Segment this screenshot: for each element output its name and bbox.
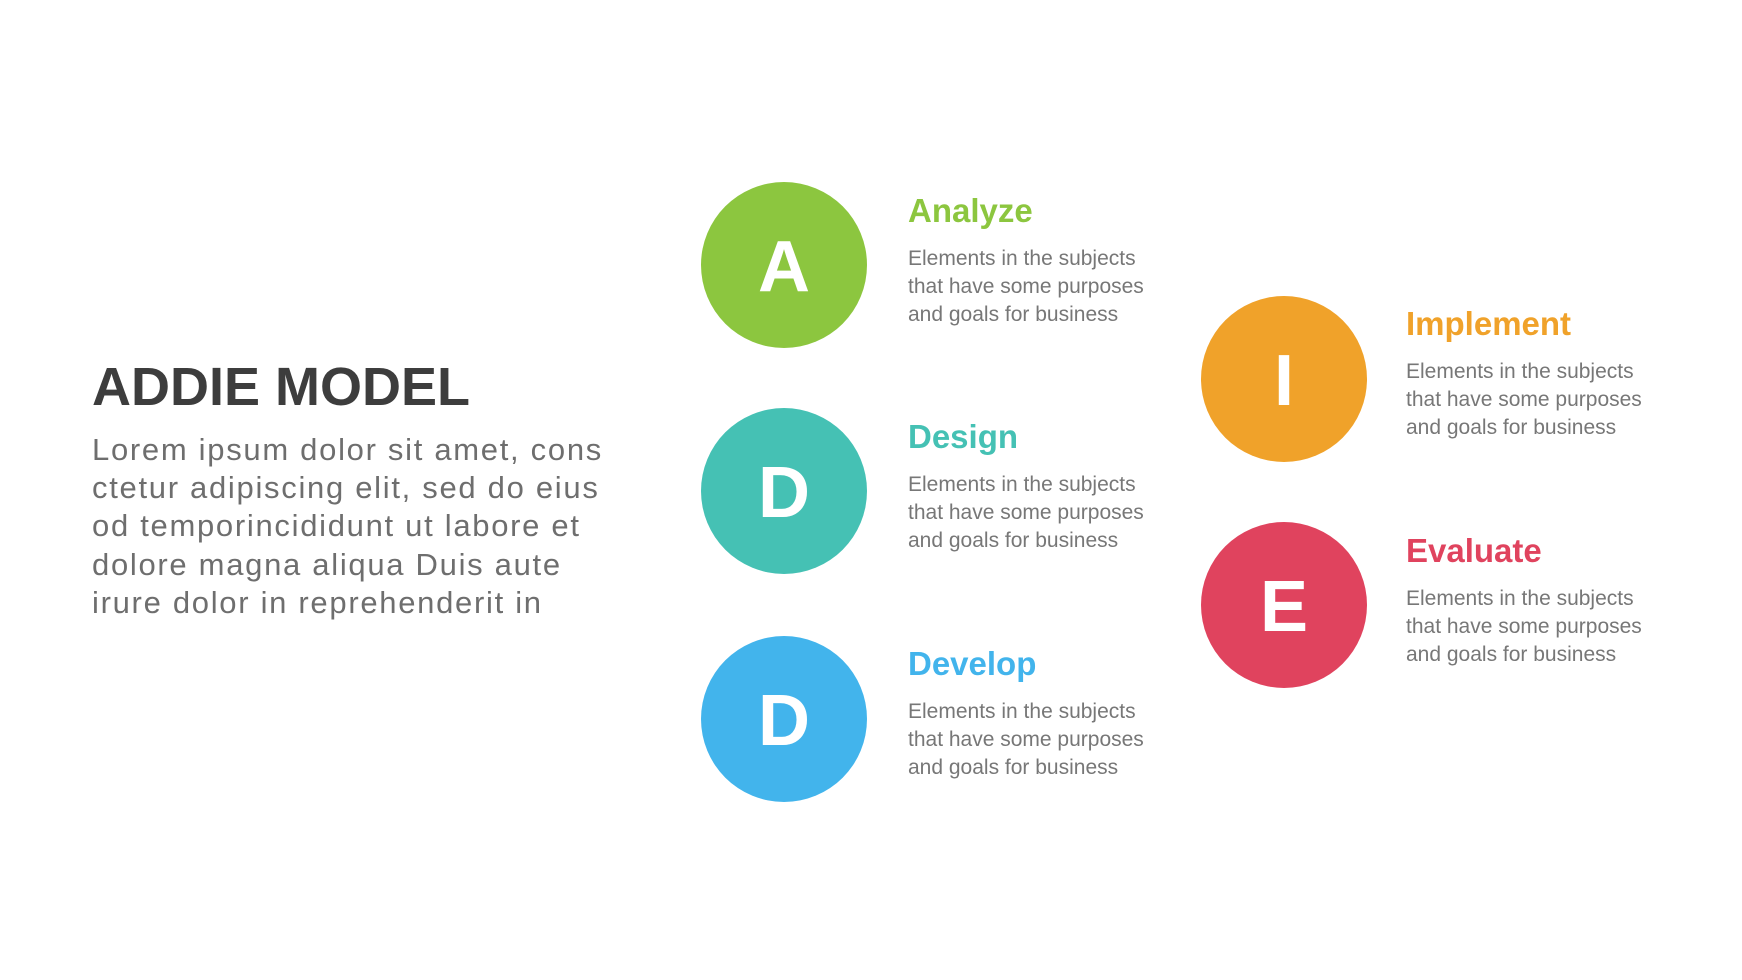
text: Analyze description: and goals for business <box>908 303 1118 326</box>
icon: circle A <box>701 182 867 348</box>
text: Develop description <box>908 700 1144 779</box>
text: Design description: and goals for business <box>908 529 1118 552</box>
icon: circle D: D <box>758 453 810 533</box>
heading: Design: Design <box>908 418 1018 455</box>
intro paragraph <box>92 432 603 620</box>
icon: circle A: A <box>758 227 810 307</box>
step: Analyze <box>701 182 1144 348</box>
intro paragraph: ctetur adipiscing elit, sed do eius <box>92 470 600 505</box>
text: Analyze description: that have some purposes <box>908 275 1144 298</box>
heading: Evaluate: Evaluate <box>1406 532 1542 569</box>
text: Design description <box>908 473 1144 552</box>
icon: circle I <box>1201 296 1367 462</box>
icon: circle D <box>701 408 867 574</box>
text: Design description: Elements in the subjects <box>908 473 1136 496</box>
text: Analyze description <box>908 247 1144 326</box>
heading: Analyze: Analyze <box>908 192 1033 229</box>
text: Evaluate description: and goals for business <box>1406 643 1616 666</box>
icon: circle D: D <box>758 681 810 761</box>
intro paragraph: dolore magna aliqua Duis aute <box>92 547 562 582</box>
heading: Develop: Develop <box>908 645 1036 682</box>
text: Develop description: that have some purposes <box>908 728 1144 751</box>
text: Evaluate description: Elements in the subjects <box>1406 587 1634 610</box>
text: Design description: that have some purposes <box>908 501 1144 524</box>
text: Develop description: Elements in the subjects <box>908 700 1136 723</box>
icon: circle E: E <box>1260 567 1308 647</box>
step: Develop <box>701 636 1144 802</box>
icon: circle E <box>1201 522 1367 688</box>
intro paragraph: irure dolor in reprehenderit in <box>92 585 543 620</box>
step: Design <box>701 408 1144 574</box>
text: Evaluate description <box>1406 587 1642 666</box>
text: Implement description: Elements in the subjects <box>1406 360 1634 383</box>
text: Develop description: and goals for business <box>908 756 1118 779</box>
heading: Implement: Implement <box>1406 305 1571 342</box>
intro paragraph: od temporincididunt ut labore et <box>92 508 581 543</box>
text: Implement description: and goals for business <box>1406 416 1616 439</box>
text: Implement description: that have some purposes <box>1406 388 1642 411</box>
text: Evaluate description: that have some purposes <box>1406 615 1642 638</box>
icon: circle I: I <box>1274 341 1294 421</box>
title: ADDIE MODEL <box>92 357 470 417</box>
intro paragraph: Lorem ipsum dolor sit amet, cons <box>92 432 603 467</box>
step: Evaluate <box>1201 522 1642 688</box>
text: Analyze description: Elements in the subjects <box>908 247 1136 270</box>
text: Implement description <box>1406 360 1642 439</box>
step: Implement <box>1201 296 1642 462</box>
icon: circle D <box>701 636 867 802</box>
